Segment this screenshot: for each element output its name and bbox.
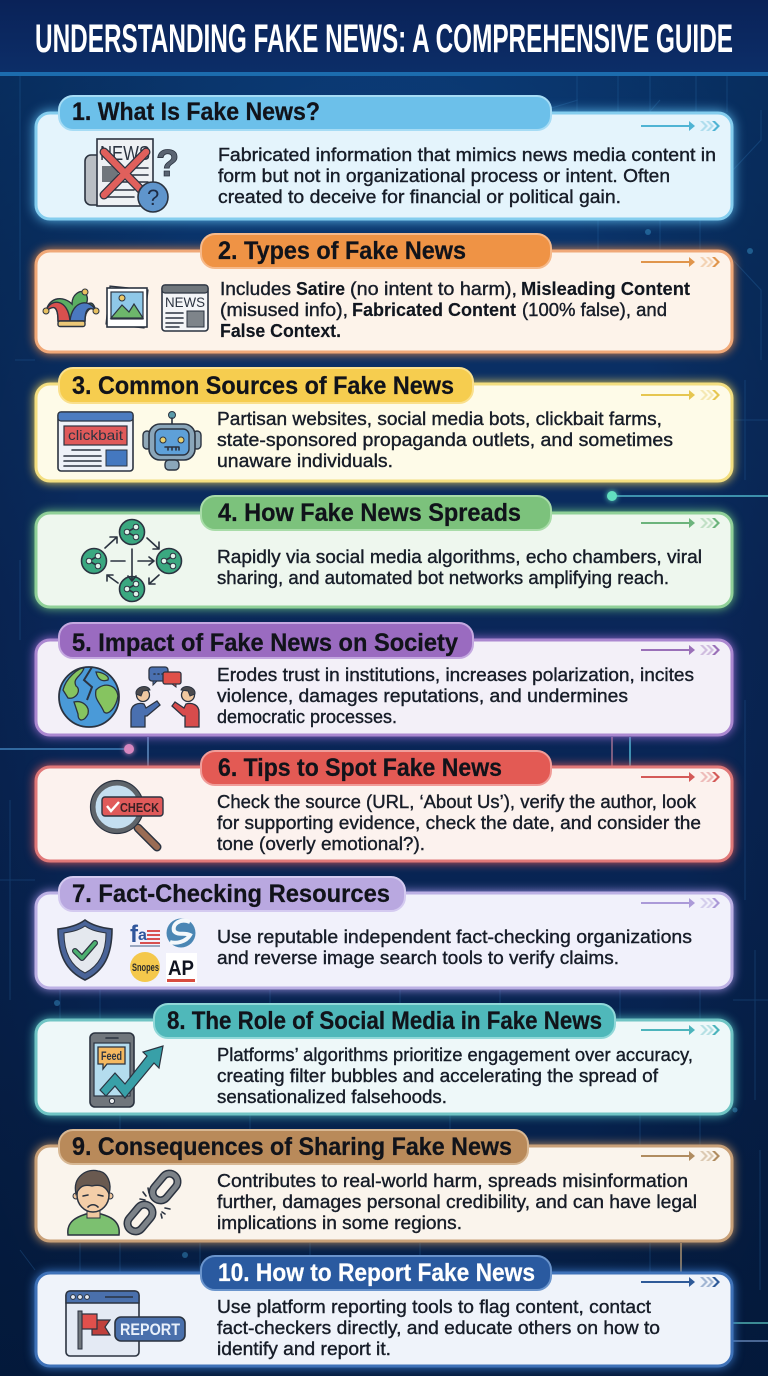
icon: photos bbox=[106, 286, 148, 328]
body text 9 bbox=[217, 1171, 697, 1233]
body text 2: (misused info), bbox=[220, 300, 348, 320]
body text 8 bbox=[217, 1045, 693, 1107]
arrow 7 bbox=[641, 898, 720, 908]
body text 1: form but not in organizational process or intent. Often bbox=[218, 166, 670, 186]
panel 7: resources bbox=[36, 877, 732, 988]
icon: phone feed trend bbox=[90, 1033, 163, 1107]
arrow 4 bbox=[641, 518, 720, 528]
circuit accent: connector stubs bbox=[148, 737, 768, 1341]
heading 7: 7. Fact-Checking Resources bbox=[72, 880, 390, 908]
icon: report flag window: REPORT bbox=[120, 1320, 181, 1339]
arrow 3 bbox=[641, 390, 720, 400]
body text 6 bbox=[217, 792, 701, 854]
arrow 9 bbox=[641, 1151, 720, 1161]
body text 2 bbox=[220, 279, 690, 341]
icon: news page: NEWS bbox=[165, 294, 205, 310]
body text 10: Use platform reporting tools to flag content, contact bbox=[217, 1297, 651, 1317]
icon: clickbait browser bbox=[58, 412, 133, 471]
icon: cracked globe bbox=[59, 667, 119, 727]
body text 4: sharing, and automated bot networks amplifying reach. bbox=[217, 568, 669, 588]
body text 1: Fabricated information that mimics news media content in bbox=[218, 145, 716, 165]
body text 10: identify and report it. bbox=[217, 1339, 391, 1359]
icon: magnifier check bbox=[90, 780, 163, 847]
heading 4: 4. How Fake News Spreads bbox=[218, 499, 521, 527]
icon: phone feed trend: Feed bbox=[101, 1049, 122, 1063]
body text 5: Erodes trust in institutions, increases polarization, incites bbox=[217, 665, 694, 685]
icon: fact-checker logos: Snopes bbox=[132, 962, 159, 974]
body text 1 bbox=[218, 145, 716, 207]
body text 7: and reverse image search tools to verify claims. bbox=[217, 948, 619, 968]
body text 8: creating filter bubbles and accelerating the spread of bbox=[217, 1066, 659, 1086]
icon: fact-checker logos bbox=[130, 918, 197, 983]
panel 1: what is fake news bbox=[36, 96, 732, 219]
icon: fact-checker logos: a bbox=[138, 927, 147, 944]
icon: fact-checker logos: AP bbox=[168, 957, 194, 980]
body text 3: unaware individuals. bbox=[217, 451, 393, 471]
circuit accent: pink node and line bbox=[0, 744, 134, 754]
body text 4: Rapidly via social media algorithms, echo chambers, viral bbox=[217, 547, 702, 567]
panel 8: social media role bbox=[36, 1004, 732, 1114]
body text 8: Platforms’ algorithms prioritize engagement over accuracy, bbox=[217, 1045, 693, 1065]
body text 7: Use reputable independent fact-checking organizations bbox=[217, 927, 692, 947]
body text 1: created to deceive for financial or political gain. bbox=[218, 187, 621, 207]
body text 10 bbox=[217, 1297, 660, 1359]
body text 8: sensationalized falsehoods. bbox=[217, 1087, 447, 1107]
panel 10: report bbox=[36, 1256, 732, 1366]
icon: news page bbox=[162, 285, 208, 331]
panel 6: tips bbox=[36, 751, 732, 861]
icon: share network bbox=[82, 520, 182, 602]
arrow 2 bbox=[641, 257, 720, 267]
body text 9: further, damages personal credibility, and can have legal bbox=[217, 1192, 697, 1212]
body text 3 bbox=[217, 409, 673, 471]
icon: jester hat bbox=[43, 289, 99, 326]
header band bbox=[0, 0, 768, 76]
arrow 10 bbox=[641, 1277, 720, 1287]
panel 5: impact bbox=[36, 623, 732, 735]
body text 2: Misleading Content bbox=[521, 279, 690, 299]
body text 4 bbox=[217, 547, 702, 588]
heading 3: 3. Common Sources of Fake News bbox=[72, 372, 454, 400]
body text 3: Partisan websites, social media bots, clickbait farms, bbox=[217, 409, 662, 429]
heading 10: 10. How to Report Fake News bbox=[218, 1259, 535, 1287]
icon: fact-checker logos: f bbox=[130, 921, 139, 948]
panel 4: spreads bbox=[36, 496, 732, 607]
arrow 1 bbox=[641, 121, 720, 131]
body text 2: False Context. bbox=[220, 321, 341, 341]
body text 2: Satire bbox=[296, 279, 345, 299]
heading 6: 6. Tips to Spot Fake News bbox=[218, 754, 502, 782]
arrow 6 bbox=[641, 772, 720, 782]
arrow 5 bbox=[641, 645, 720, 655]
body text 7 bbox=[217, 927, 692, 968]
icon: shield bbox=[58, 920, 112, 980]
heading 1: 1. What Is Fake News? bbox=[72, 98, 320, 126]
body text 2: (100% false), and bbox=[522, 300, 667, 320]
body text 6: tone (overly emotional?). bbox=[217, 834, 425, 854]
icon: broken chain bbox=[124, 1170, 181, 1235]
body text 10: fact-checkers directly, and educate others on how to bbox=[217, 1318, 660, 1338]
icon: crossed-out newspaper: ? bbox=[156, 143, 179, 185]
body text 9: implications in some regions. bbox=[217, 1213, 462, 1233]
heading 2: 2. Types of Fake News bbox=[218, 237, 466, 265]
circuit accent: green node and line bbox=[607, 491, 768, 501]
panel 9: consequences bbox=[36, 1130, 732, 1241]
heading 8: 8. The Role of Social Media in Fake News bbox=[167, 1007, 602, 1035]
body text 5 bbox=[217, 665, 694, 727]
heading 5: 5. Impact of Fake News on Society bbox=[72, 629, 458, 657]
icon: arguing people bbox=[131, 667, 199, 727]
body text 5: democratic processes. bbox=[217, 707, 397, 727]
body text 2: (no intent to harm), bbox=[350, 279, 517, 299]
body text 9: Contributes to real-world harm, spreads misinformation bbox=[217, 1171, 688, 1191]
icon: robot bbox=[143, 412, 201, 470]
body text 2: Includes bbox=[220, 279, 291, 299]
heading 9: 9. Consequences of Sharing Fake News bbox=[72, 1133, 512, 1161]
body text 6: for supporting evidence, check the date, and consider the bbox=[217, 813, 701, 833]
icon: magnifier check: CHECK bbox=[120, 801, 159, 815]
panel 3: sources bbox=[36, 368, 732, 481]
body text 5: violence, damages reputations, and undermines bbox=[217, 686, 628, 706]
icon: crossed-out newspaper: ? bbox=[147, 185, 159, 210]
icon: crossed-out newspaper: NEWS bbox=[100, 143, 150, 165]
icon: clickbait browser: clickbait bbox=[68, 427, 123, 443]
icon: report flag window bbox=[66, 1291, 185, 1356]
arrow 8 bbox=[641, 1025, 720, 1035]
icon: sad person bbox=[68, 1170, 119, 1235]
body text 6: Check the source (URL, ‘About Us’), verify the author, look bbox=[217, 792, 697, 812]
body text 2: Fabricated Content bbox=[352, 300, 516, 320]
body text 3: state-sponsored propaganda outlets, and sometimes bbox=[217, 430, 673, 450]
icon: crossed-out newspaper bbox=[85, 139, 179, 212]
panel 2: types bbox=[36, 234, 732, 352]
